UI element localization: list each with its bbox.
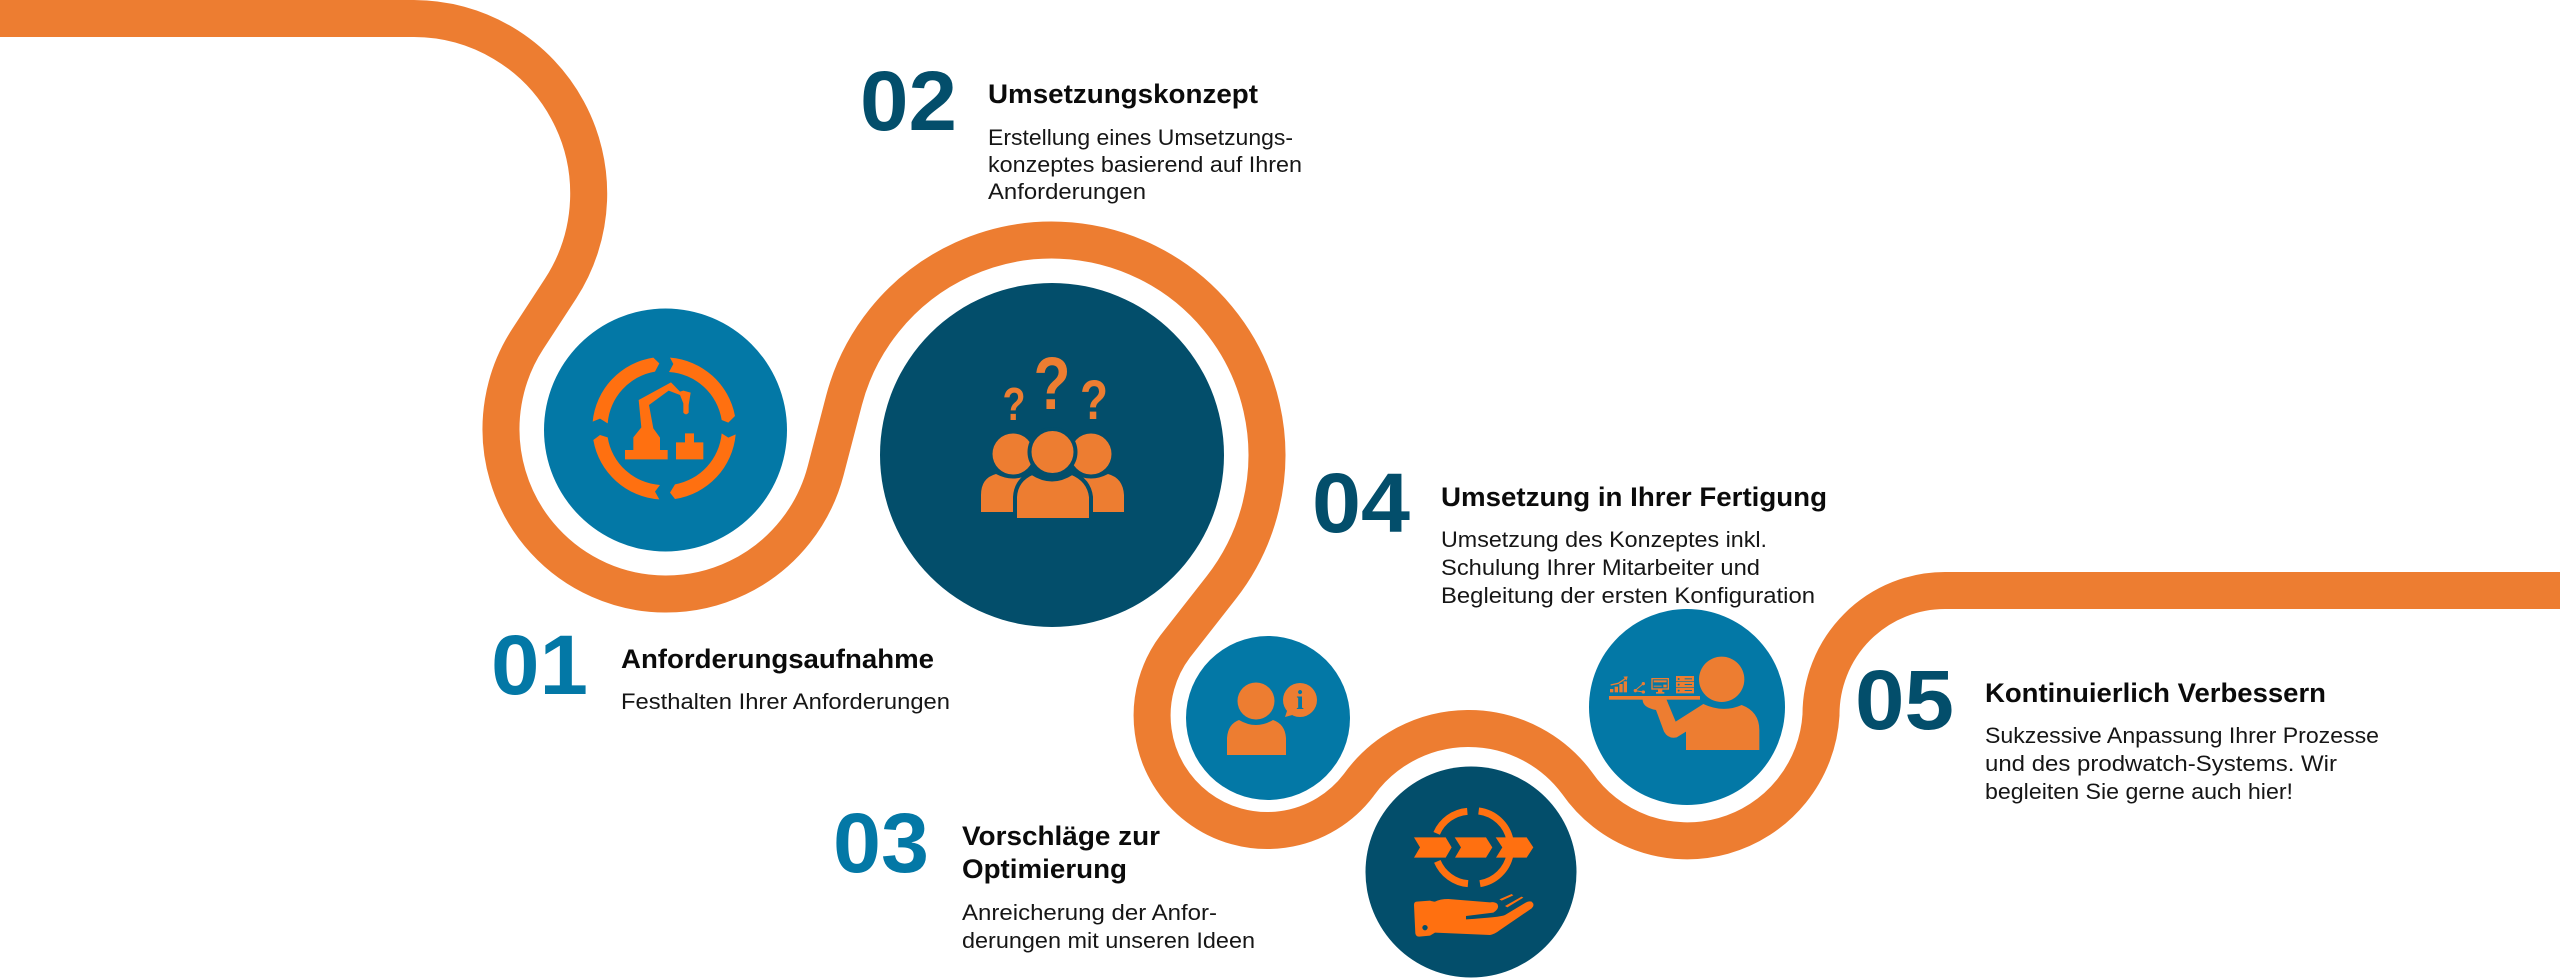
step 02 text block xyxy=(860,54,1302,204)
number 03: 03 xyxy=(833,796,929,890)
heading 04: Umsetzung in Ihrer Fertigung xyxy=(1441,482,1827,512)
icon: robot arm in cycle ring xyxy=(593,358,736,499)
description 05: und des prodwatch-Systems. Wir xyxy=(1985,751,2338,776)
description 02 xyxy=(988,125,1302,204)
heading 01: Anforderungsaufnahme xyxy=(621,644,934,674)
description 04: Begleitung der ersten Konfiguration xyxy=(1441,583,1815,608)
description 04: Schulung Ihrer Mitarbeiter und xyxy=(1441,555,1760,580)
step 04 text block xyxy=(1312,456,1827,608)
icon: hand holding process arrows xyxy=(1414,811,1533,937)
description 03: derungen mit unseren Ideen xyxy=(962,928,1255,953)
icon: group with question marks: ? xyxy=(1034,342,1070,425)
description 02: konzeptes basierend auf Ihren xyxy=(988,152,1302,177)
step 04 circle with offering hand icon xyxy=(1366,766,1576,978)
description 03: Anreicherung der Anfor- xyxy=(962,900,1217,925)
icon: group with question marks xyxy=(981,342,1124,520)
description 04 xyxy=(1441,527,1815,608)
description 05: begleiten Sie gerne auch hier! xyxy=(1985,779,2293,804)
step 01 text block xyxy=(491,618,950,714)
number 01: 01 xyxy=(491,618,588,712)
step 05 text block xyxy=(1855,653,2379,804)
heading 03: Optimierung xyxy=(962,854,1127,884)
icon: group with question marks: ? xyxy=(1080,368,1108,431)
heading 02: Umsetzungskonzept xyxy=(988,79,1258,109)
step 03 text block xyxy=(833,796,1255,953)
icon: person with info bubble xyxy=(1227,682,1317,755)
heading 05: Kontinuierlich Verbessern xyxy=(1985,678,2326,708)
description 01: Festhalten Ihrer Anforderungen xyxy=(621,689,950,714)
step 03 circle with info person icon xyxy=(1186,636,1350,800)
description 02: Anforderungen xyxy=(988,179,1146,204)
step 01 circle with robot icon xyxy=(544,308,787,552)
icon: person serving data on a tray xyxy=(1609,657,1759,750)
description 05 xyxy=(1985,723,2379,804)
description 03 xyxy=(962,900,1255,953)
heading 03 xyxy=(962,821,1161,884)
number 02: 02 xyxy=(860,54,957,148)
step 05 circle with serving person icon xyxy=(1589,609,1785,805)
icon: person with info bubble: i xyxy=(1296,685,1304,715)
step 02 circle with people icon xyxy=(880,283,1224,627)
number 05: 05 xyxy=(1855,653,1954,747)
icon: group with question marks: ? xyxy=(1002,378,1026,430)
description 02: Erstellung eines Umsetzungs- xyxy=(988,125,1293,150)
description 04: Umsetzung des Konzeptes inkl. xyxy=(1441,527,1767,552)
number 04: 04 xyxy=(1312,456,1410,550)
description 05: Sukzessive Anpassung Ihrer Prozesse xyxy=(1985,723,2379,748)
heading 03: Vorschläge zur xyxy=(962,821,1161,851)
